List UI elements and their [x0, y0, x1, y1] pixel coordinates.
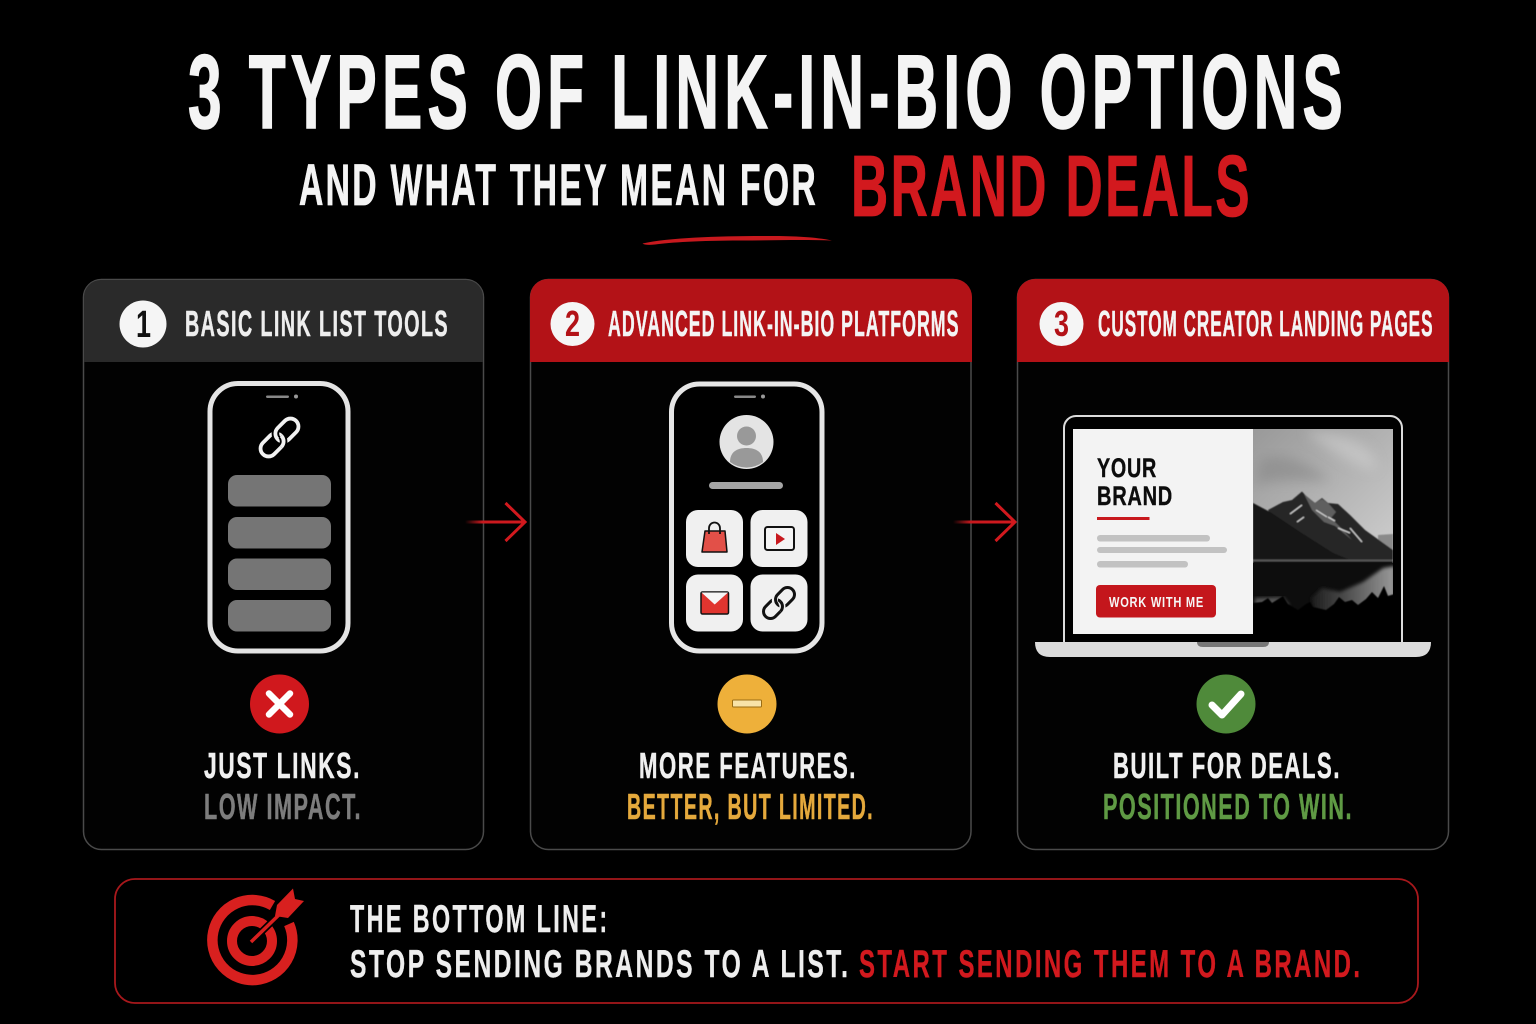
callout: the bottom line	[115, 879, 1418, 1003]
panel header 1: BASIC LINK LIST TOOLS	[185, 303, 449, 344]
button: work with me: WORK WITH ME	[1109, 594, 1204, 611]
callout text: STOP SENDING BRANDS TO A LIST.	[350, 943, 850, 986]
subtitle: BRAND DEALS	[851, 138, 1252, 235]
panel header 3	[1017, 279, 1449, 362]
icon: phone with profile and tiles	[672, 384, 822, 651]
caption 2: MORE FEATURES.	[639, 745, 857, 786]
arrow 2 to 3	[953, 503, 1015, 541]
panel: advanced link-in-bio platforms	[530, 279, 972, 850]
icon: chain link	[257, 415, 302, 460]
button: work with me	[1096, 585, 1216, 618]
panel header 1: 1	[136, 304, 151, 346]
caption 2: BETTER, BUT LIMITED.	[627, 786, 874, 827]
icon: amber minus status	[718, 674, 776, 734]
landing page left column	[1073, 429, 1253, 634]
landing page left column: BRAND	[1097, 481, 1173, 511]
panel header 2	[530, 279, 972, 362]
laptop base	[1035, 642, 1431, 657]
icon: profile avatar	[720, 415, 774, 469]
caption 3	[1103, 745, 1353, 827]
tile: video play	[750, 510, 808, 567]
tile: mail	[686, 574, 743, 632]
landing page left column: YOUR	[1097, 453, 1157, 483]
tile: chain link	[750, 574, 808, 632]
tile: shopping bag	[686, 510, 743, 567]
subtitle	[299, 138, 1252, 235]
panel: custom creator landing pages	[1017, 279, 1449, 850]
arrow 1 to 2	[465, 503, 525, 541]
panel header 2: ADVANCED LINK-IN-BIO PLATFORMS	[608, 303, 960, 344]
icon: target with arrow	[212, 888, 304, 980]
caption 1: LOW IMPACT.	[204, 786, 362, 827]
caption 1: JUST LINKS.	[204, 745, 361, 786]
caption 3: BUILT FOR DEALS.	[1113, 745, 1341, 786]
callout text: THE BOTTOM LINE:	[350, 898, 610, 941]
panel: basic link list tools	[84, 280, 484, 850]
icon: laptop with landing page	[1035, 416, 1431, 657]
caption 2	[627, 745, 874, 827]
subtitle: AND WHAT THEY MEAN FOR	[299, 153, 818, 218]
icon: phone with link list	[210, 384, 348, 651]
red swoosh underline	[642, 236, 832, 245]
caption 1	[204, 745, 362, 827]
callout text	[350, 898, 1362, 986]
panel header 1	[84, 280, 483, 362]
panel header 2: 2	[565, 303, 580, 344]
mountain lake photo	[1253, 429, 1393, 610]
icon: red cross status	[250, 674, 309, 734]
icon: green check status	[1196, 674, 1256, 734]
caption 3: POSITIONED TO WIN.	[1103, 786, 1353, 827]
panel header 3: 3	[1054, 303, 1069, 344]
